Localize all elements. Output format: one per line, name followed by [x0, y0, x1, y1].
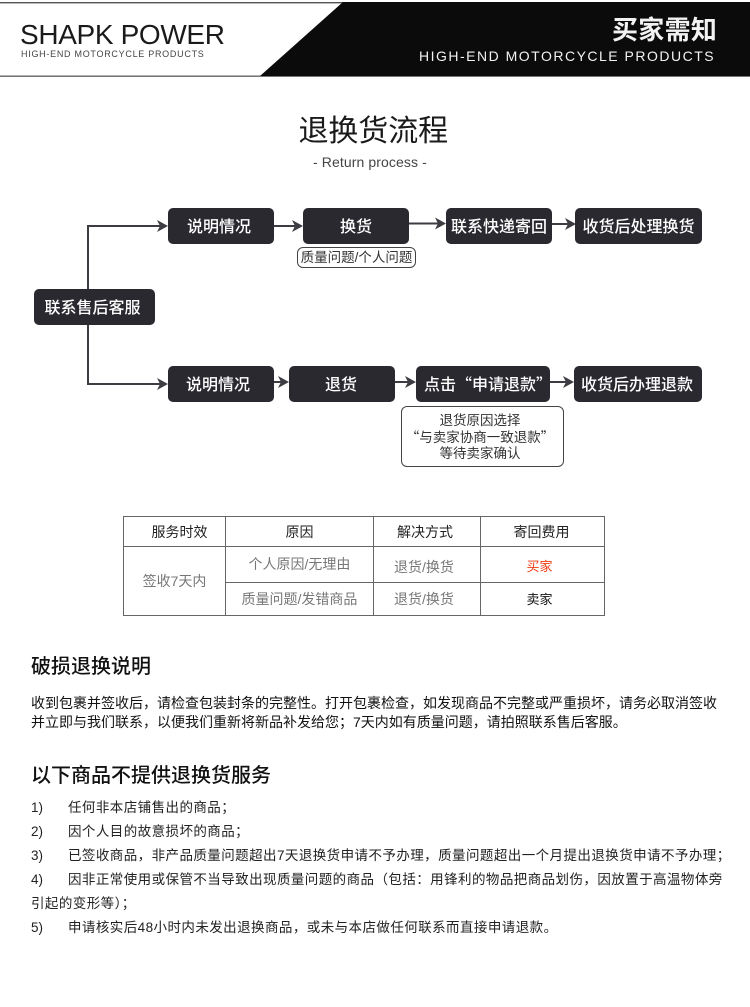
step: exchange: 换货 [340, 219, 372, 236]
table header: return cost: 寄回费用 [514, 524, 570, 540]
reason: personal: 个人原因/无理由 [249, 556, 350, 572]
step: contact after-sales [34, 289, 155, 325]
list item 3: 3) [31, 848, 43, 863]
step: click request refund: 点击“申请退款” [424, 371, 552, 395]
note: refund reason: 退货原因选择 [440, 409, 520, 429]
header banner [0, 2, 750, 77]
list item 1: 任何非本店铺售出的商品； [68, 800, 235, 815]
step: refund after receipt: 收货后办理退款 [581, 377, 693, 394]
paragraph line 2: 并立即与我们联系，以便我们重新将新品补发给您；7天内如有质量问题，请拍照联系售后客服。 [31, 714, 627, 730]
list item 2: 因个人目的故意损坏的商品； [68, 824, 249, 839]
flow chart connectors [87, 218, 575, 390]
heading: excluded goods: 以下商品不提供退换货服务 [31, 765, 271, 787]
note: refund reason: 等待卖家确认 [440, 442, 520, 462]
subtitle: - Return process - [313, 154, 427, 170]
period cell: 签收7天内 [143, 573, 206, 589]
step: process exchange after receipt [575, 208, 702, 244]
reason: quality: 质量问题/发错商品 [242, 591, 357, 607]
solution row 1: 退货/换货 [394, 558, 454, 574]
banner heading: 买家需知 [612, 15, 717, 45]
step: explain situation (exchange) [168, 208, 274, 244]
heading: damage returns: 破损退换说明 [31, 656, 151, 678]
note: refund reason [401, 406, 564, 467]
list item 4 continuation: 引起的变形等）； [31, 896, 136, 911]
step: contact courier [446, 208, 552, 244]
step: refund [289, 366, 395, 402]
solution row 2: 退货/换货 [394, 591, 454, 607]
note: exchange reasons: 质量问题/个人问题 [301, 250, 412, 265]
note: refund reason: “与卖家协商一致退款” [406, 426, 554, 446]
step: contact after-sales: 联系售后客服 [44, 300, 140, 317]
list item 4: 因非正常使用或保管不当导致出现质量问题的商品（包括：用锋利的物品把商品划伤，因放置于高温物体旁 [68, 872, 723, 887]
excluded goods list [31, 800, 731, 935]
step: explain situation (exchange): 说明情况 [187, 219, 251, 236]
step: exchange [303, 208, 409, 244]
table header: service period: 服务时效 [152, 524, 208, 540]
cost: buyer: 买家 [526, 559, 552, 574]
table header: solution: 解决方式 [397, 524, 453, 540]
service table [123, 516, 605, 616]
step: explain situation (refund) [168, 366, 274, 402]
paragraph line 1: 收到包裹并签收后，请检查包装封条的完整性。打开包裹检查，如发现商品不完整或严重损坏，请务必取消签收 [31, 695, 717, 711]
step: process exchange after receipt: 收货后处理换货 [582, 219, 694, 236]
brand tagline: HIGH-END MOTORCYCLE PRODUCTS [21, 49, 205, 59]
step: contact courier: 联系快递寄回 [451, 219, 547, 236]
list item 4: 4) [31, 872, 43, 887]
table header: reason: 原因 [286, 524, 314, 540]
banner subheading: HIGH-END MOTORCYCLE PRODUCTS [419, 48, 715, 64]
note: exchange reasons [297, 247, 416, 268]
list item 2: 2) [31, 824, 43, 839]
title: 退换货流程 [298, 115, 448, 148]
list item 5: 5) [31, 920, 43, 935]
cost: seller: 卖家 [526, 592, 552, 606]
list item 3: 已签收商品，非产品质量问题超出7天退换货申请不予办理，质量问题超出一个月提出退换货申请不予办理； [68, 848, 731, 863]
list item 1: 1) [31, 800, 43, 815]
step: explain situation (refund): 说明情况 [186, 377, 250, 394]
list item 5: 申请核实后48小时内未发出退换商品，或未与本店做任何联系而直接申请退款。 [68, 920, 558, 935]
step: refund after receipt [574, 366, 702, 402]
step: refund: 退货 [325, 377, 357, 394]
step: click request refund [416, 366, 550, 402]
brand name: SHAPK POWER [20, 19, 225, 50]
damage returns text [31, 695, 717, 730]
